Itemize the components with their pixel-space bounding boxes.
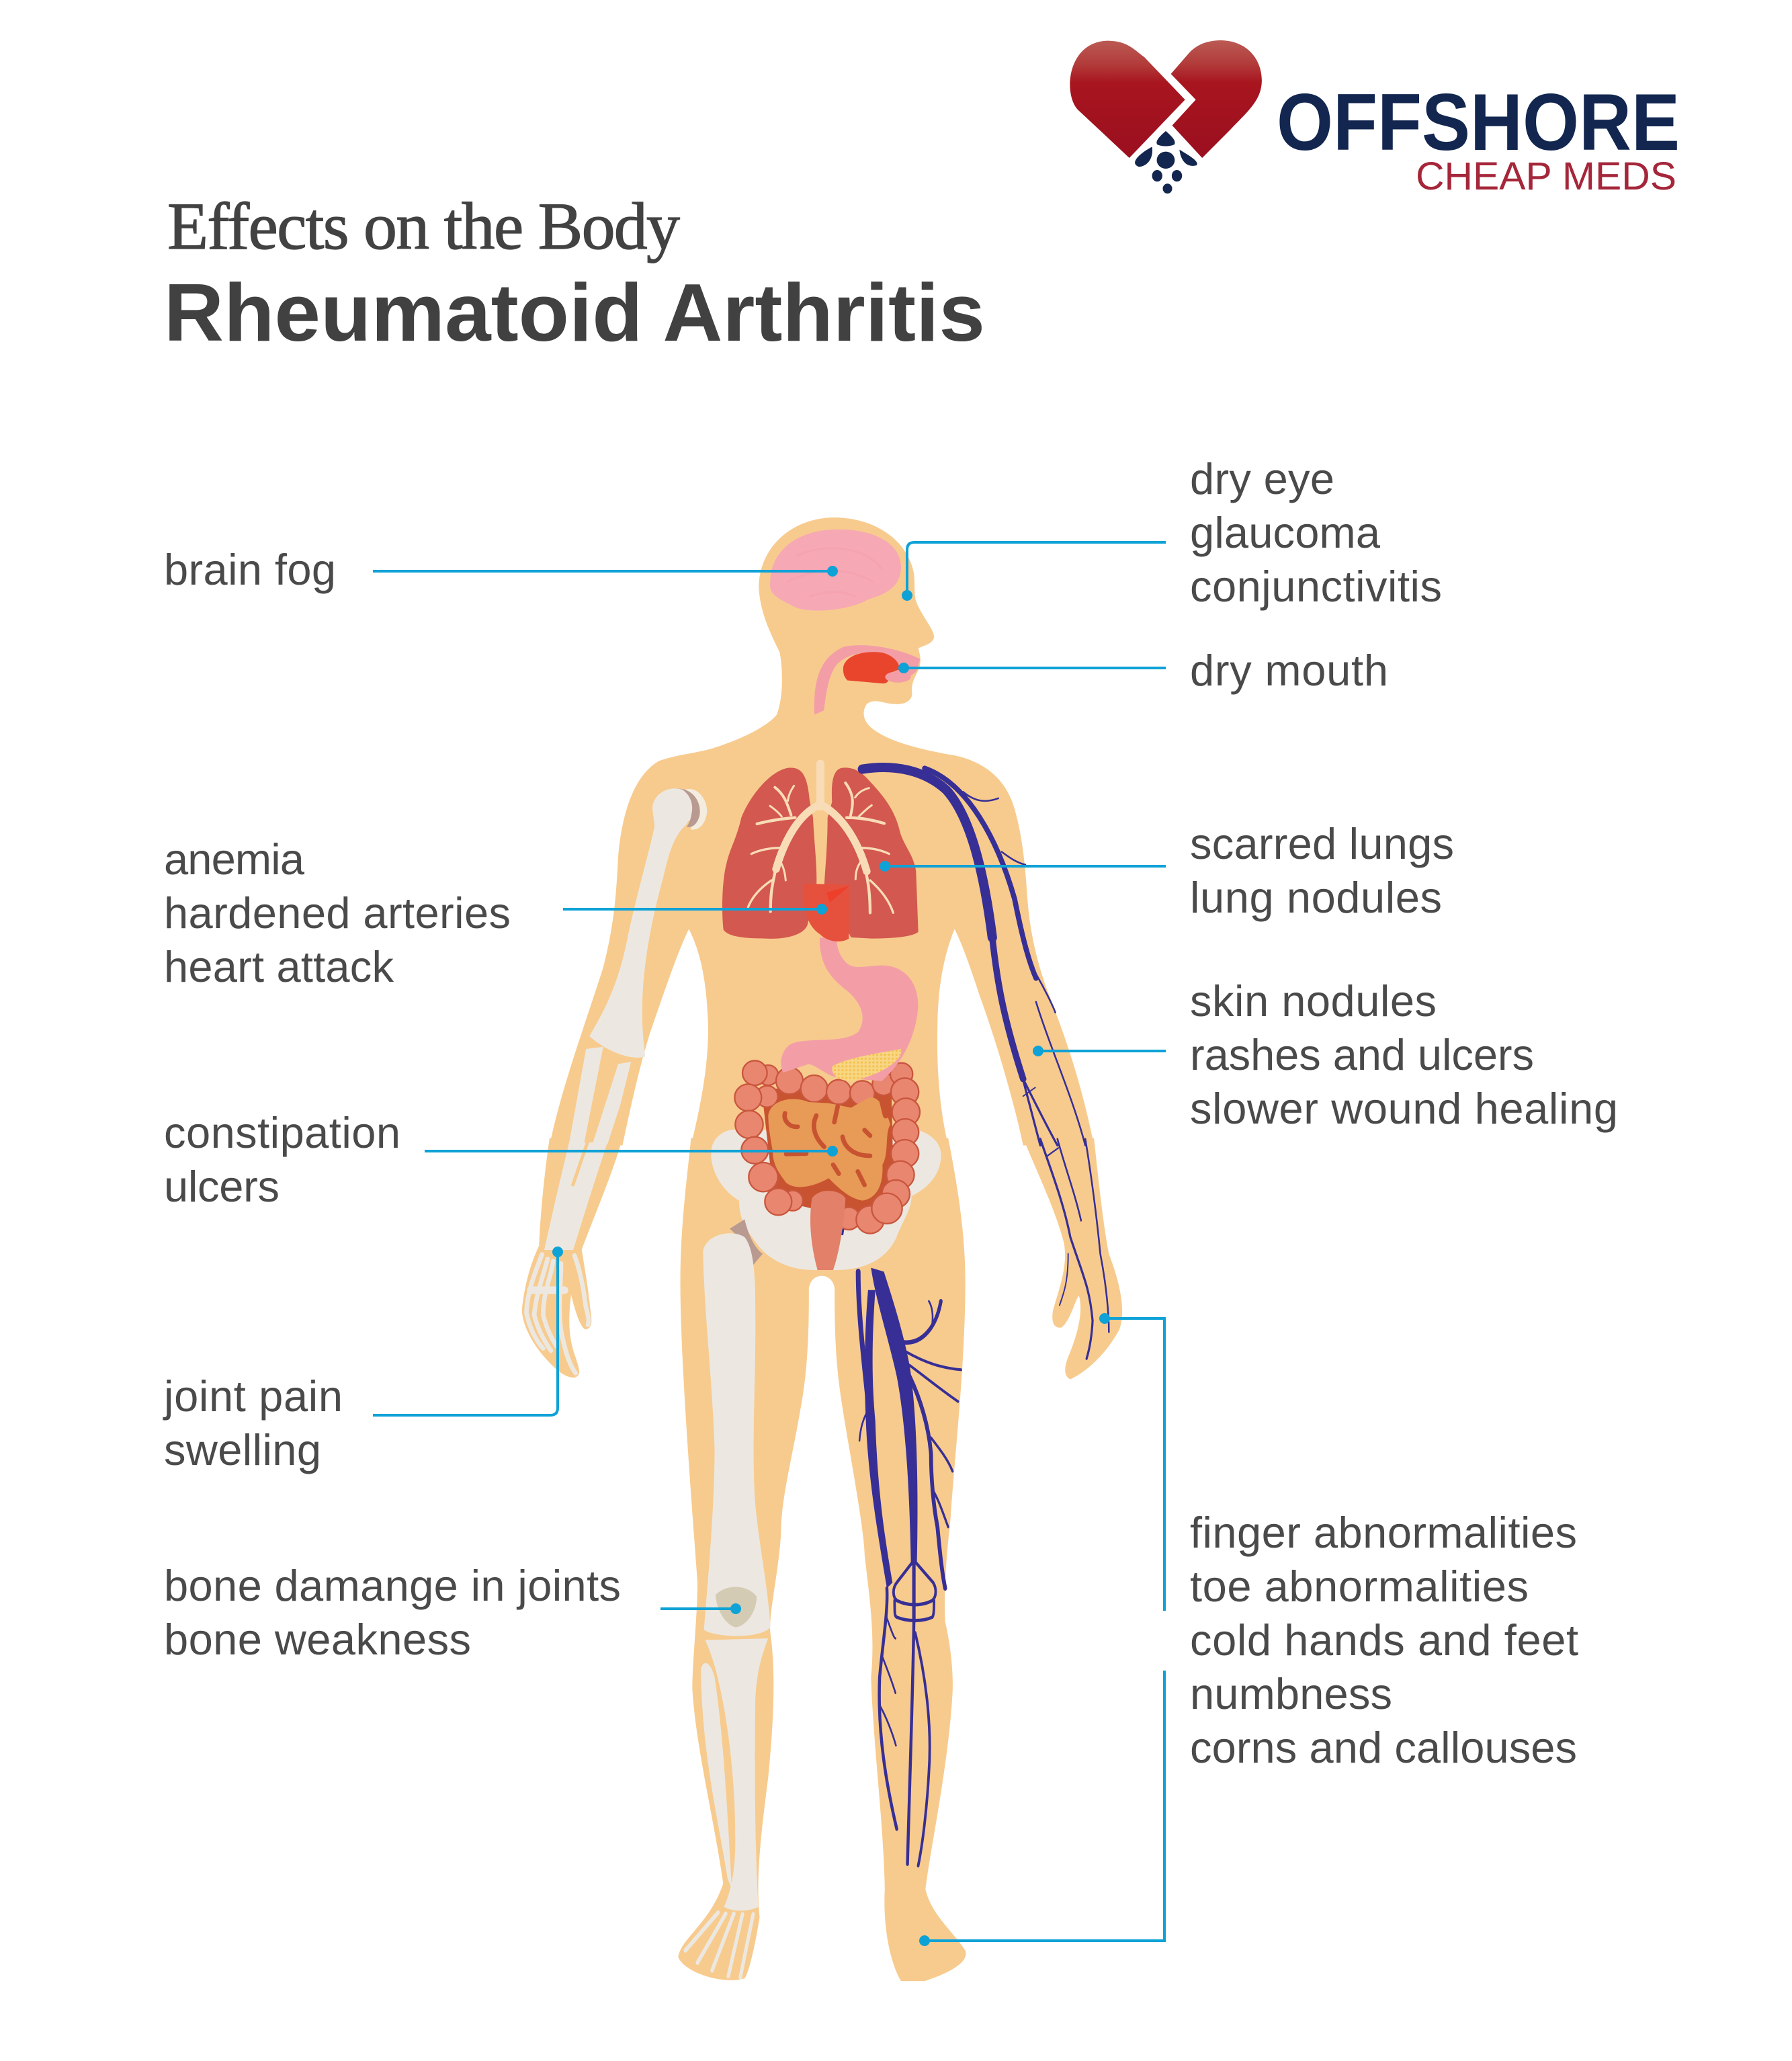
skeleton: left leg bones xyxy=(685,1219,770,1977)
labels: glaucoma xyxy=(1190,508,1381,557)
callout: brain fog xyxy=(164,545,838,594)
leader line xyxy=(563,908,822,911)
subtitle: Effects on the Body xyxy=(167,189,680,263)
logo wordmark: OFFSHORE xyxy=(1277,77,1680,167)
labels: toe abnormalities xyxy=(1190,1562,1529,1611)
leader line xyxy=(660,1607,736,1610)
labels: joint pain xyxy=(163,1372,343,1421)
callout: bones xyxy=(164,1561,741,1664)
labels: ulcers xyxy=(164,1162,280,1211)
skeleton: pelvis xyxy=(711,1130,941,1270)
labels: corns and callouses xyxy=(1190,1723,1577,1772)
left hand xyxy=(522,1247,591,1378)
body figure xyxy=(522,517,1122,1981)
labels: rashes and ulcers xyxy=(1190,1030,1534,1079)
right arm lower xyxy=(1023,1138,1122,1379)
labels: lung nodules xyxy=(1190,873,1442,922)
label: brain fog xyxy=(164,545,336,594)
labels: cold hands and feet xyxy=(1190,1615,1578,1665)
labels xyxy=(163,1372,343,1474)
organs: lungs and heart xyxy=(722,764,919,941)
organs: brain xyxy=(770,530,901,611)
label: dry mouth xyxy=(1190,646,1388,695)
icon: heart xyxy=(1070,40,1262,194)
labels xyxy=(1190,819,1454,922)
callout: intestines xyxy=(164,1108,838,1211)
leader line xyxy=(373,1252,558,1415)
labels: heart attack xyxy=(164,942,394,991)
callout: lungs xyxy=(880,819,1454,922)
labels: slower wound healing xyxy=(1190,1084,1618,1133)
callout: skin xyxy=(1033,976,1618,1133)
labels: hardened arteries xyxy=(164,888,511,937)
leader line xyxy=(373,570,833,573)
labels: bone weakness xyxy=(164,1615,471,1664)
labels: finger abnormalities xyxy=(1190,1508,1577,1557)
body outline lower xyxy=(539,1138,1122,1981)
callout: heart xyxy=(164,835,827,991)
leader line xyxy=(907,542,1166,595)
skeleton: left arm bones xyxy=(544,788,707,1250)
veins: left leg xyxy=(858,1268,961,1865)
organs: small and large intestine xyxy=(734,1060,920,1270)
organs: stomach and pancreas xyxy=(781,937,919,1081)
leader line xyxy=(904,667,1166,669)
labels xyxy=(164,1108,400,1211)
labels: anemia xyxy=(164,835,305,884)
logo xyxy=(1070,40,1680,198)
leader line xyxy=(425,1150,833,1152)
leader line xyxy=(1038,1050,1166,1052)
callout: mouth xyxy=(898,646,1388,695)
callout: eye xyxy=(902,454,1442,611)
callout: extremities xyxy=(919,1313,1578,1946)
labels: bone damange in joints xyxy=(164,1561,621,1610)
callout: joints xyxy=(163,1247,563,1474)
organs: mouth and throat xyxy=(814,645,921,715)
veins: right arm xyxy=(863,767,1085,1146)
title: Rheumatoid Arthritis xyxy=(164,267,985,358)
descending colon tip xyxy=(839,1228,845,1235)
labels: constipation xyxy=(164,1108,400,1157)
labels: numbness xyxy=(1190,1669,1392,1718)
labels xyxy=(1190,454,1442,611)
logo tagline: CHEAP MEDS xyxy=(1416,155,1676,198)
labels: swelling xyxy=(164,1425,321,1474)
labels xyxy=(1190,976,1618,1133)
leader lines xyxy=(925,1318,1164,1941)
left arm lower xyxy=(539,1138,622,1249)
body outline upper xyxy=(550,517,1094,1146)
leader line xyxy=(885,865,1166,868)
labels xyxy=(164,1561,621,1664)
labels: skin nodules xyxy=(1190,976,1437,1025)
labels: dry eye xyxy=(1190,454,1334,503)
labels: scarred lungs xyxy=(1190,819,1454,868)
labels xyxy=(1190,1508,1578,1772)
labels xyxy=(164,835,511,991)
labels: conjunctivitis xyxy=(1190,562,1442,611)
